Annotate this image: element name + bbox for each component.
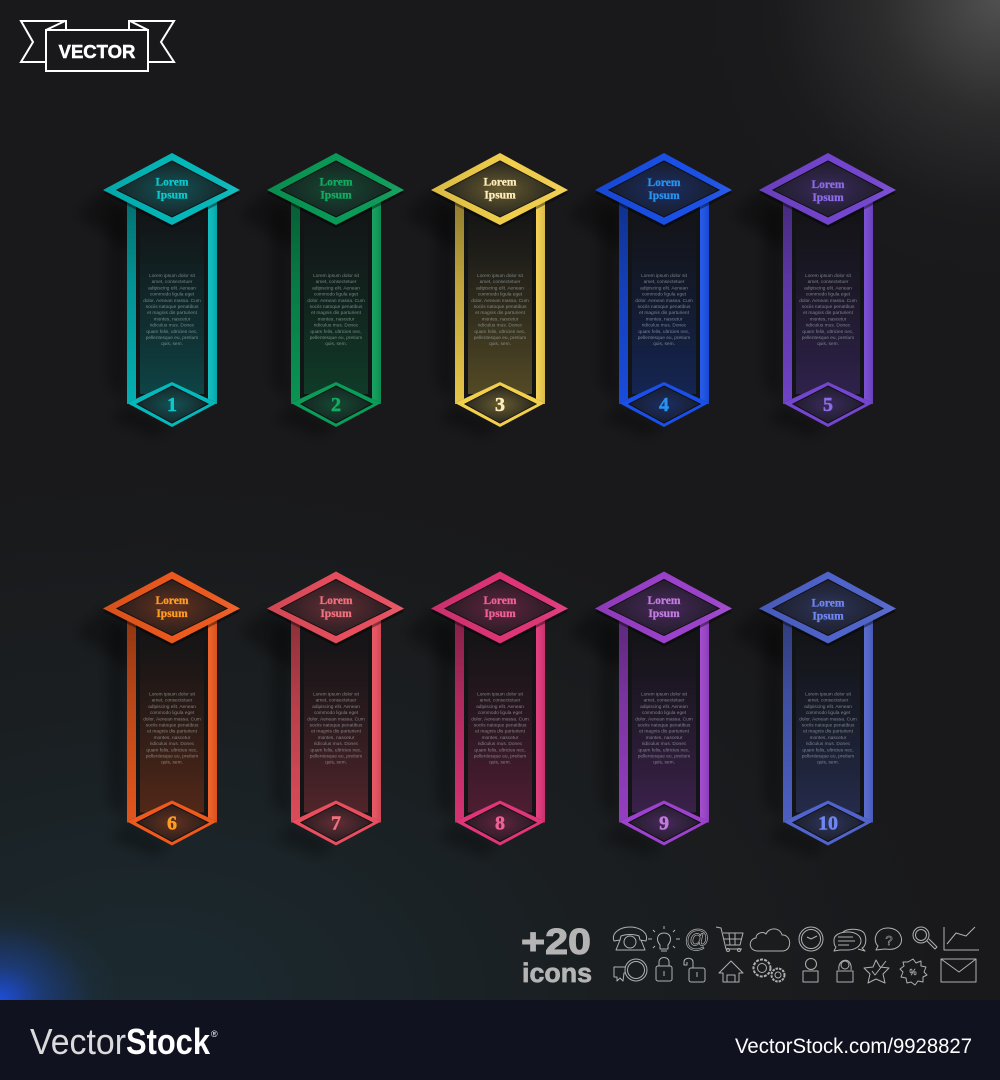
card 10: indigo: adipiscing elit. Aenean <box>804 704 852 710</box>
card 6: orange: et magnis dis parturient <box>147 729 198 735</box>
card 9: violet: montes, nascetur <box>646 735 683 741</box>
card 2: green: amet, consectetuer <box>316 279 357 285</box>
card 9: violet <box>568 572 732 856</box>
badge: VECTOR ribbon logo <box>21 21 174 71</box>
card 3: yellow: ridiculus mus. Donec <box>478 323 523 329</box>
card 2: green: adipiscing elit. Aenean <box>312 285 360 291</box>
icon: at sign: @ <box>684 925 710 953</box>
card 9: violet: Ipsum <box>648 608 680 620</box>
card 7: coral: dolor. Aenean massa. Cum <box>307 716 365 722</box>
card 9: violet: ridiculus mus. Donec <box>642 741 687 747</box>
card 1: teal <box>76 153 240 438</box>
card 9: violet: Lorem ipsum dolor sit <box>641 692 688 698</box>
card 7: coral: quis, sem. <box>325 760 347 766</box>
card 3: yellow: Lorem <box>483 176 517 188</box>
icon: cloud <box>750 929 790 951</box>
card 5: purple: adipiscing elit. Aenean <box>804 285 852 291</box>
card 3: yellow: quis, sem. <box>489 341 511 347</box>
card 4: blue: et magnis dis parturient <box>639 310 690 316</box>
icon: discount burst <box>900 959 927 985</box>
card 1: teal: quis, sem. <box>161 341 183 347</box>
card 4: blue: quis, sem. <box>653 341 675 347</box>
icon: discount burst: % <box>909 968 917 977</box>
card 6: orange: pellentesque eu, pretium <box>146 754 198 760</box>
card 9: violet: quam felis, ultricies nec, <box>638 747 690 753</box>
card 1: teal: quam felis, ultricies nec, <box>146 329 198 335</box>
card 10: indigo: sociis natoque penatibus <box>802 722 855 728</box>
card 8: pink: pellentesque eu, pretium <box>474 754 526 760</box>
card 3: yellow: 3 <box>495 394 505 416</box>
card 2: green: sociis natoque penatibus <box>310 304 363 310</box>
card 5: purple: Lorem <box>811 179 845 191</box>
icon: padlock <box>656 958 672 981</box>
card 7: coral: et magnis dis parturient <box>311 729 362 735</box>
icon: light bulb <box>648 926 680 951</box>
card 2: green: 2 <box>331 394 341 416</box>
card 7: coral: Lorem <box>319 595 353 607</box>
card 8: pink: amet, consectetuer <box>480 698 521 704</box>
card 7: coral: Lorem ipsum dolor sit <box>313 692 360 698</box>
card 7: coral: Ipsum <box>320 608 352 620</box>
footer bar <box>0 1000 1000 1080</box>
card 8: pink: et magnis dis parturient <box>475 729 526 735</box>
card 5: purple: Lorem ipsum dolor sit <box>805 273 852 279</box>
card 1: teal: Ipsum <box>156 190 188 202</box>
card 3: yellow: montes, nascetur <box>482 316 519 322</box>
card 7: coral: 7 <box>331 812 341 834</box>
card 10: indigo: dolor. Aenean massa. Cum <box>799 716 857 722</box>
card 1: teal: ridiculus mus. Donec <box>150 323 195 329</box>
card 6: orange: adipiscing elit. Aenean <box>148 704 196 710</box>
icon: key <box>614 959 647 981</box>
icon: gears <box>754 960 784 982</box>
card 1: teal: et magnis dis parturient <box>147 310 198 316</box>
card 4: blue: 4 <box>659 394 669 416</box>
card 9: violet: 9 <box>659 812 669 834</box>
card 4: blue: dolor. Aenean massa. Cum <box>635 298 693 304</box>
card 5: purple: pellentesque eu, pretium <box>802 335 854 341</box>
card 8: pink <box>404 572 568 856</box>
card 7: coral: sociis natoque penatibus <box>310 722 363 728</box>
card 6: orange: dolor. Aenean massa. Cum <box>143 716 201 722</box>
card 7: coral: commodo ligula eget <box>314 710 359 716</box>
card 2: green: et magnis dis parturient <box>311 310 362 316</box>
text: +20 icons: +20 <box>521 921 591 962</box>
card 8: pink: montes, nascetur <box>482 735 519 741</box>
card 4: blue <box>568 153 732 438</box>
card 5: purple: commodo ligula eget <box>806 292 851 298</box>
card 6: orange: Ipsum <box>156 608 188 620</box>
card 3: yellow: commodo ligula eget <box>478 292 523 298</box>
card 2: green: commodo ligula eget <box>314 292 359 298</box>
card 2: green: montes, nascetur <box>318 316 355 322</box>
card 5: purple: quam felis, ultricies nec, <box>802 329 854 335</box>
card 6: orange: Lorem <box>155 595 189 607</box>
card 2: green: quis, sem. <box>325 341 347 347</box>
icon: open padlock <box>684 958 705 982</box>
card 6: orange: sociis natoque penatibus <box>146 722 199 728</box>
card 4: blue: montes, nascetur <box>646 316 683 322</box>
icon: line chart <box>944 927 979 950</box>
card 6: orange: Lorem ipsum dolor sit <box>149 692 196 698</box>
card 7: coral: adipiscing elit. Aenean <box>312 704 360 710</box>
card 3: yellow: Ipsum <box>484 190 516 202</box>
card 4: blue: quam felis, ultricies nec, <box>638 329 690 335</box>
card 5: purple: 5 <box>823 394 833 416</box>
card 9: violet: adipiscing elit. Aenean <box>640 704 688 710</box>
card 5: purple: ridiculus mus. Donec <box>806 323 851 329</box>
card 4: blue: pellentesque eu, pretium <box>638 335 690 341</box>
card 2: green: Lorem ipsum dolor sit <box>313 273 360 279</box>
icon: question bubble <box>875 928 902 950</box>
card 2: green: dolor. Aenean massa. Cum <box>307 298 365 304</box>
card 9: violet: commodo ligula eget <box>642 710 687 716</box>
card 6: orange: quam felis, ultricies nec, <box>146 747 198 753</box>
card 10: indigo: Lorem <box>811 598 845 610</box>
card 2: green: Lorem <box>319 176 353 188</box>
card 1: teal: 1 <box>167 394 177 416</box>
card 8: pink: dolor. Aenean massa. Cum <box>471 716 529 722</box>
card 4: blue: Lorem ipsum dolor sit <box>641 273 688 279</box>
card 8: pink: Lorem <box>483 595 517 607</box>
card 4: blue: adipiscing elit. Aenean <box>640 285 688 291</box>
card 7: coral: amet, consectetuer <box>316 698 357 704</box>
card 9: violet: sociis natoque penatibus <box>638 722 691 728</box>
card 8: pink: quis, sem. <box>489 760 511 766</box>
card 8: pink: sociis natoque penatibus <box>474 722 527 728</box>
card 5: purple: dolor. Aenean massa. Cum <box>799 298 857 304</box>
card 8: pink: Ipsum <box>484 608 516 620</box>
icon: chat bubbles <box>834 929 866 951</box>
card 5: purple <box>732 153 896 438</box>
card 9: violet: Lorem <box>647 595 681 607</box>
card 2: green <box>240 153 404 438</box>
card 3: yellow: sociis natoque penatibus <box>474 304 527 310</box>
card 8: pink: commodo ligula eget <box>478 710 523 716</box>
card 10: indigo: pellentesque eu, pretium <box>802 754 854 760</box>
card 6: orange: commodo ligula eget <box>150 710 195 716</box>
card 7: coral: ridiculus mus. Donec <box>314 741 359 747</box>
card 3: yellow: amet, consectetuer <box>480 279 521 285</box>
icon: shopping cart <box>716 927 743 952</box>
card 6: orange: 6 <box>167 812 177 834</box>
card 8: pink: adipiscing elit. Aenean <box>476 704 524 710</box>
text: image id: VectorStock.com/9928827 <box>735 1035 972 1058</box>
card 1: teal: montes, nascetur <box>154 316 191 322</box>
card 6: orange: ridiculus mus. Donec <box>150 741 195 747</box>
card 9: violet: amet, consectetuer <box>644 698 685 704</box>
card 1: teal: Lorem ipsum dolor sit <box>149 273 196 279</box>
logo: VectorStock <box>30 1021 218 1062</box>
card 1: teal: pellentesque eu, pretium <box>146 335 198 341</box>
card 4: blue: commodo ligula eget <box>642 292 687 298</box>
card 10: indigo: 10 <box>818 812 838 834</box>
icon: question bubble: ? <box>885 933 893 948</box>
logo: VectorStock: Vector <box>30 1021 126 1062</box>
card 9: violet: pellentesque eu, pretium <box>638 754 690 760</box>
card 3: yellow <box>404 153 568 438</box>
card 2: green: ridiculus mus. Donec <box>314 323 359 329</box>
card 9: violet: et magnis dis parturient <box>639 729 690 735</box>
card 1: teal: sociis natoque penatibus <box>146 304 199 310</box>
card 3: yellow: quam felis, ultricies nec, <box>474 329 526 335</box>
card 3: yellow: Lorem ipsum dolor sit <box>477 273 524 279</box>
card 3: yellow: pellentesque eu, pretium <box>474 335 526 341</box>
card 4: blue: amet, consectetuer <box>644 279 685 285</box>
card 1: teal: dolor. Aenean massa. Cum <box>143 298 201 304</box>
card 7: coral: pellentesque eu, pretium <box>310 754 362 760</box>
card 2: green: quam felis, ultricies nec, <box>310 329 362 335</box>
card 5: purple: montes, nascetur <box>810 316 847 322</box>
icon: telephone <box>613 927 647 950</box>
card 10: indigo <box>732 572 896 856</box>
card 7: coral <box>240 572 404 856</box>
card 5: purple: et magnis dis parturient <box>803 310 854 316</box>
card 6: orange: quis, sem. <box>161 760 183 766</box>
card 4: blue: Ipsum <box>648 190 680 202</box>
card 10: indigo: ridiculus mus. Donec <box>806 741 851 747</box>
card 6: orange <box>76 572 240 856</box>
badge: VECTOR ribbon logo: VECTOR <box>59 41 135 62</box>
card 9: violet: dolor. Aenean massa. Cum <box>635 716 693 722</box>
icon: clock <box>799 927 823 951</box>
icon: star with check <box>864 960 889 983</box>
icon: envelope <box>941 959 976 982</box>
card 9: violet: quis, sem. <box>653 760 675 766</box>
icon: house <box>719 961 743 982</box>
icon: magnifier <box>913 927 937 949</box>
card 5: purple: sociis natoque penatibus <box>802 304 855 310</box>
card 7: coral: quam felis, ultricies nec, <box>310 747 362 753</box>
card 10: indigo: montes, nascetur <box>810 735 847 741</box>
text: +20 icons: icons <box>522 958 592 988</box>
card 2: green: pellentesque eu, pretium <box>310 335 362 341</box>
card 5: purple: amet, consectetuer <box>808 279 849 285</box>
card 1: teal: commodo ligula eget <box>150 292 195 298</box>
card 7: coral: montes, nascetur <box>318 735 355 741</box>
card 3: yellow: adipiscing elit. Aenean <box>476 285 524 291</box>
card 6: orange: montes, nascetur <box>154 735 191 741</box>
card 8: pink: ridiculus mus. Donec <box>478 741 523 747</box>
card 2: green: Ipsum <box>320 190 352 202</box>
card 4: blue: ridiculus mus. Donec <box>642 323 687 329</box>
card 4: blue: sociis natoque penatibus <box>638 304 691 310</box>
logo: VectorStock: ® <box>211 1029 218 1039</box>
card 1: teal: adipiscing elit. Aenean <box>148 285 196 291</box>
card 10: indigo: quam felis, ultricies nec, <box>802 747 854 753</box>
card 6: orange: amet, consectetuer <box>152 698 193 704</box>
card 8: pink: 8 <box>495 812 505 834</box>
icon set <box>613 925 979 985</box>
card 5: purple: Ipsum <box>812 192 844 204</box>
card 1: teal: Lorem <box>155 176 189 188</box>
card 1: teal: amet, consectetuer <box>152 279 193 285</box>
card 8: pink: quam felis, ultricies nec, <box>474 747 526 753</box>
card 10: indigo: commodo ligula eget <box>806 710 851 716</box>
icon: woman <box>837 960 853 982</box>
card 3: yellow: et magnis dis parturient <box>475 310 526 316</box>
card 10: indigo: Ipsum <box>812 610 844 622</box>
icon: man <box>803 958 818 982</box>
card 10: indigo: amet, consectetuer <box>808 698 849 704</box>
card 4: blue: Lorem <box>647 177 681 189</box>
card 10: indigo: Lorem ipsum dolor sit <box>805 692 852 698</box>
text: +20 icons <box>521 921 592 988</box>
card 5: purple: quis, sem. <box>817 341 839 347</box>
card 3: yellow: dolor. Aenean massa. Cum <box>471 298 529 304</box>
card 8: pink: Lorem ipsum dolor sit <box>477 692 524 698</box>
card 10: indigo: et magnis dis parturient <box>803 729 854 735</box>
logo: VectorStock: Stock <box>126 1021 211 1062</box>
card 10: indigo: quis, sem. <box>817 760 839 766</box>
